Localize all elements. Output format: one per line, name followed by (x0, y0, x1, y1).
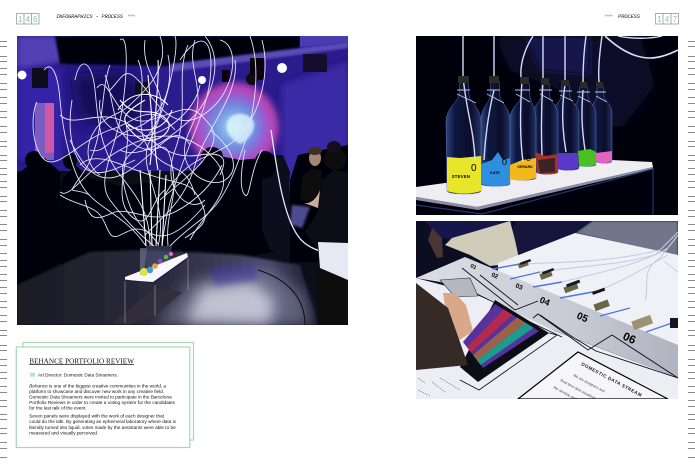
green marker (604, 15, 612, 16)
strip numbers (469, 263, 637, 347)
silver strip (416, 257, 678, 378)
stage lights (18, 58, 287, 96)
bottle labels: KATE (490, 171, 500, 175)
body text (29, 384, 177, 436)
long tube to side table (270, 130, 318, 252)
bottle labels: 0 (502, 157, 507, 167)
photo: coloured bottles close-up (416, 36, 678, 215)
bottle neck clips (457, 90, 607, 103)
crowd silhouettes (17, 145, 348, 285)
printed circuit lines (462, 268, 678, 378)
margin ticks: right edge (688, 41, 695, 458)
body text: Portfolio Reviews in order to create a voting system for the candidates (29, 400, 176, 405)
strip numbers: 05 (575, 311, 590, 325)
blurred crowd behind bottles (495, 36, 655, 130)
curved tubes at top right (605, 36, 678, 58)
body text: measured and visually perceived. (29, 431, 98, 436)
person in background (425, 221, 520, 266)
small print lower left (418, 378, 460, 396)
green marker (128, 15, 135, 16)
body text: could do the talk. By generating an ephemeral laboratory where data is (29, 419, 177, 424)
margin ticks: left edge (0, 41, 7, 458)
text panel (16, 342, 193, 448)
bottle group (446, 36, 678, 194)
page number 146: 6 (33, 15, 38, 24)
bottle labels: STEVEN (452, 174, 470, 179)
page number 146: 4 (26, 15, 31, 24)
valves and blue tubes (492, 232, 678, 332)
page number 147: 7 (673, 15, 678, 24)
pink side panel (35, 103, 54, 160)
body text: Domestic Data Streamers were invited to participate in the Barcelona (29, 395, 172, 400)
bottles on white table (112, 246, 188, 325)
bright tube knot (118, 60, 172, 246)
panel heading: BEHANCE PORTFOLIO REVIEW (29, 357, 134, 365)
strip numbers: 01 (469, 263, 477, 271)
paper sign: DOMESTIC DATA STREAM (581, 361, 643, 398)
floor (17, 250, 318, 325)
lower white panel (416, 278, 678, 399)
tablet (460, 300, 557, 390)
bottle labels: GERARD (517, 165, 533, 169)
body text: platform to showcase and discover new work in any creative field. (29, 389, 164, 394)
bottle bodies (446, 81, 612, 194)
strip numbers: 03 (514, 282, 524, 292)
bottle caps (458, 76, 603, 88)
paper sign: We are designers and (573, 373, 605, 393)
coloured liquids (447, 156, 481, 194)
page number 147 (656, 14, 678, 24)
people at right (290, 141, 348, 250)
side table (318, 242, 348, 325)
page number 147: 4 (665, 15, 670, 24)
strip numbers: 06 (621, 331, 637, 347)
running head: INFOGRAPHICS – PROCESS (56, 14, 124, 20)
bottle labels (452, 153, 533, 179)
body text: Seven panels were displayed with the work of each designer that (29, 414, 165, 419)
back frame (23, 342, 194, 440)
page number 146: 1 (18, 15, 23, 24)
body text: Behance is one of the biggest creative communities in the world, a (29, 384, 167, 388)
right page header (604, 14, 678, 24)
bottle labels: 0 (471, 163, 477, 174)
tablet outline on table (460, 333, 557, 390)
hanging tubes (33, 36, 265, 246)
back wall and ceiling (17, 36, 348, 190)
paper sign: Real time data visualization (560, 378, 600, 402)
page number 147: 1 (657, 15, 662, 24)
strip numbers: 04 (538, 295, 551, 308)
photo: voting table with tablet (416, 221, 678, 408)
strip numbers: 02 (490, 272, 499, 281)
hand and dark sleeve (416, 283, 473, 370)
paper sign: We develop and discover (553, 385, 591, 408)
running head: PROCESS (618, 14, 641, 20)
credit line: Art Director: Domestic Data Streamers. (38, 373, 118, 378)
projected pink circle (188, 81, 280, 173)
front frame (16, 347, 190, 448)
white board with valves (498, 233, 678, 350)
bottle labels: 0 (526, 153, 531, 163)
feed tubes (463, 36, 602, 162)
left page header (16, 14, 135, 24)
body text: for the last talk of the event. (29, 406, 87, 411)
background floor (575, 221, 678, 258)
photo: tube installation in dark room (17, 36, 348, 325)
paper sign (517, 351, 668, 399)
body text: literally turned into liquid, votes made by the assistants were able to be (29, 425, 176, 430)
white table top (416, 160, 653, 215)
page number 146 (16, 14, 39, 24)
